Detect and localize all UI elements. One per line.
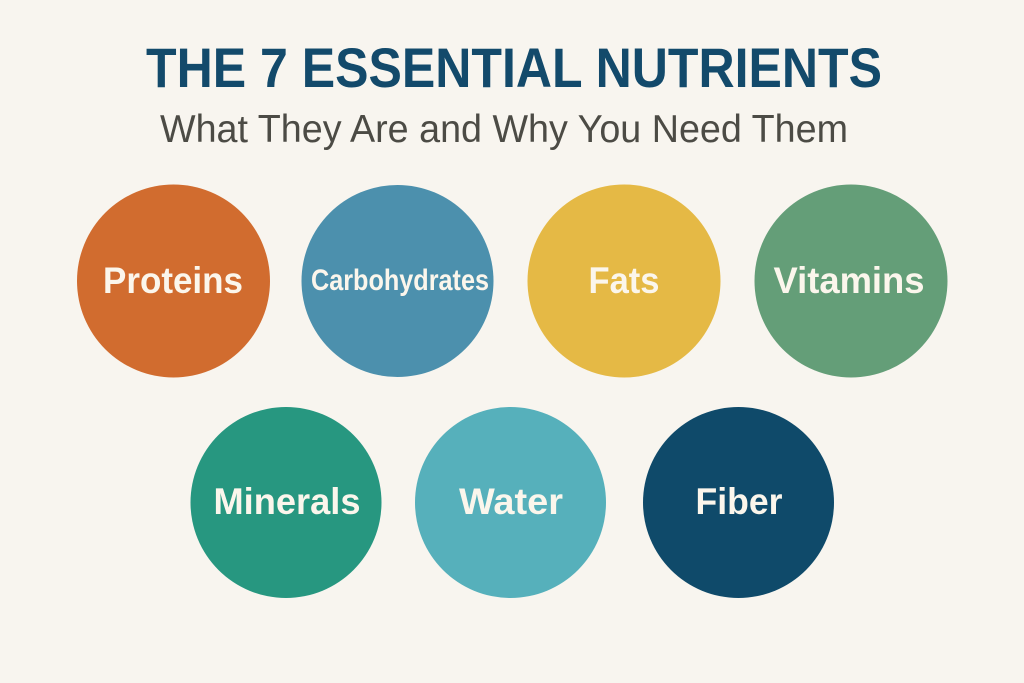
circle: Proteins (77, 184, 270, 378)
circle: Proteins: Proteins (103, 260, 243, 301)
circle: Carbohydrates: Carbohydrates (311, 264, 489, 297)
circle: Vitamins (754, 184, 948, 378)
circle: Minerals: Minerals (214, 481, 360, 522)
circle: Carbohydrates (302, 185, 494, 377)
circle: Vitamins: Vitamins (774, 260, 924, 301)
circle: Water (415, 407, 606, 598)
subtitle: What They Are and Why You Need Them (160, 108, 848, 151)
circle: Minerals (190, 407, 382, 598)
circle: Fiber: Fiber (696, 481, 782, 522)
circle: Fats (528, 184, 720, 378)
circle: Fats: Fats (588, 260, 660, 301)
circle: Fiber (643, 407, 834, 598)
title: THE 7 ESSENTIAL NUTRIENTS (146, 36, 882, 99)
circle: Water: Water (459, 481, 563, 522)
